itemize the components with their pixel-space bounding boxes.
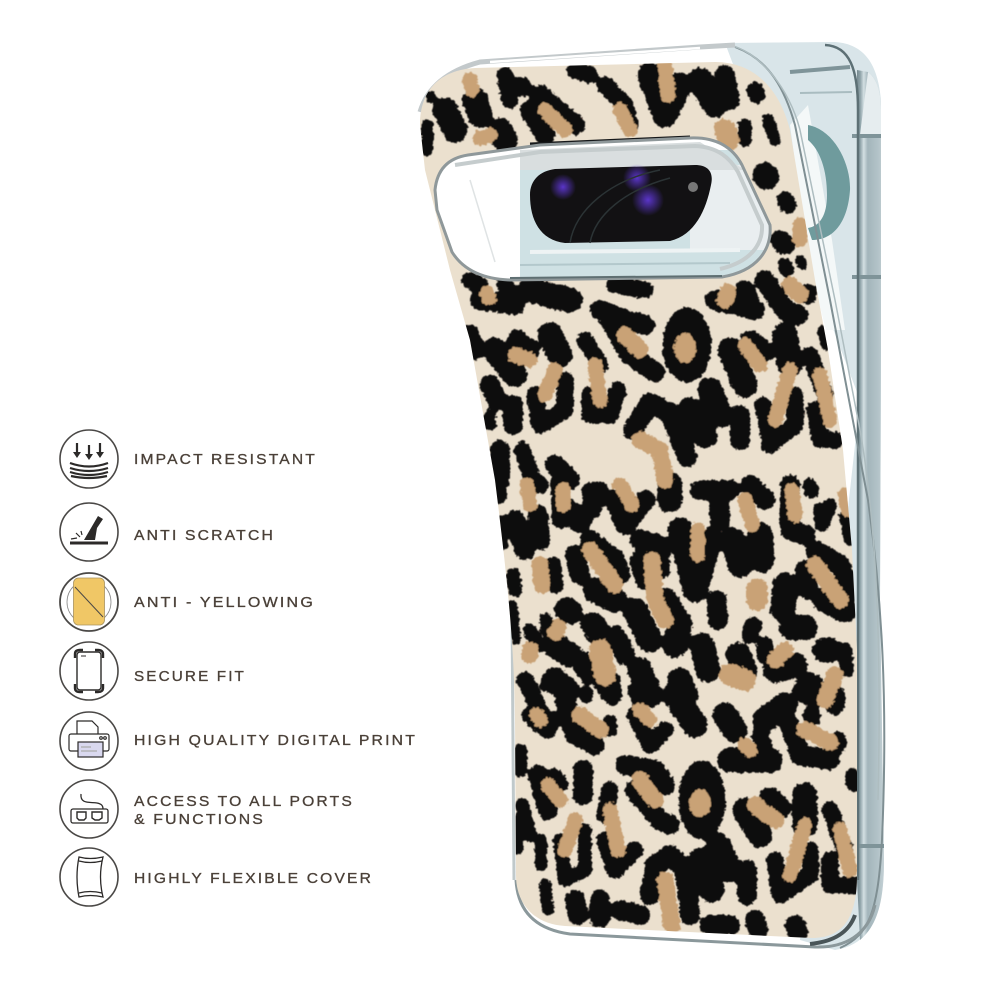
black spots <box>427 70 855 932</box>
camera window <box>530 164 712 243</box>
feature: anti yellowing: ANTI - YELLOWING <box>134 595 315 611</box>
feature: anti scratch: ANTI SCRATCH <box>134 528 275 544</box>
phone body behind clear case <box>725 42 884 950</box>
feature: anti scratch <box>60 503 275 561</box>
feature: anti yellowing <box>60 573 315 631</box>
leopard print back panel <box>410 50 870 950</box>
camera bar ring <box>808 125 850 240</box>
feature: secure fit <box>60 642 246 700</box>
feature: high quality digital print <box>60 712 417 770</box>
feature: impact resistant <box>60 430 317 488</box>
clear case outline <box>420 44 884 948</box>
feature: highly flexible cover: HIGHLY FLEXIBLE COVER <box>134 871 373 887</box>
feature: access to all ports: & FUNCTIONS <box>134 812 265 828</box>
feature list <box>60 430 417 906</box>
feature: impact resistant: IMPACT RESISTANT <box>134 452 317 468</box>
camera lens housing <box>430 135 775 285</box>
white panel behind curve <box>790 105 845 330</box>
feature: access to all ports <box>60 780 354 838</box>
feature: highly flexible cover <box>60 848 373 906</box>
rosette tan centres <box>674 333 711 817</box>
feature: access to all ports: ACCESS TO ALL PORTS <box>134 794 354 810</box>
feature: high quality digital print: HIGH QUALITY DIGITAL PRINT <box>134 733 417 749</box>
tan patches <box>470 65 850 925</box>
feature: secure fit: SECURE FIT <box>134 669 246 685</box>
